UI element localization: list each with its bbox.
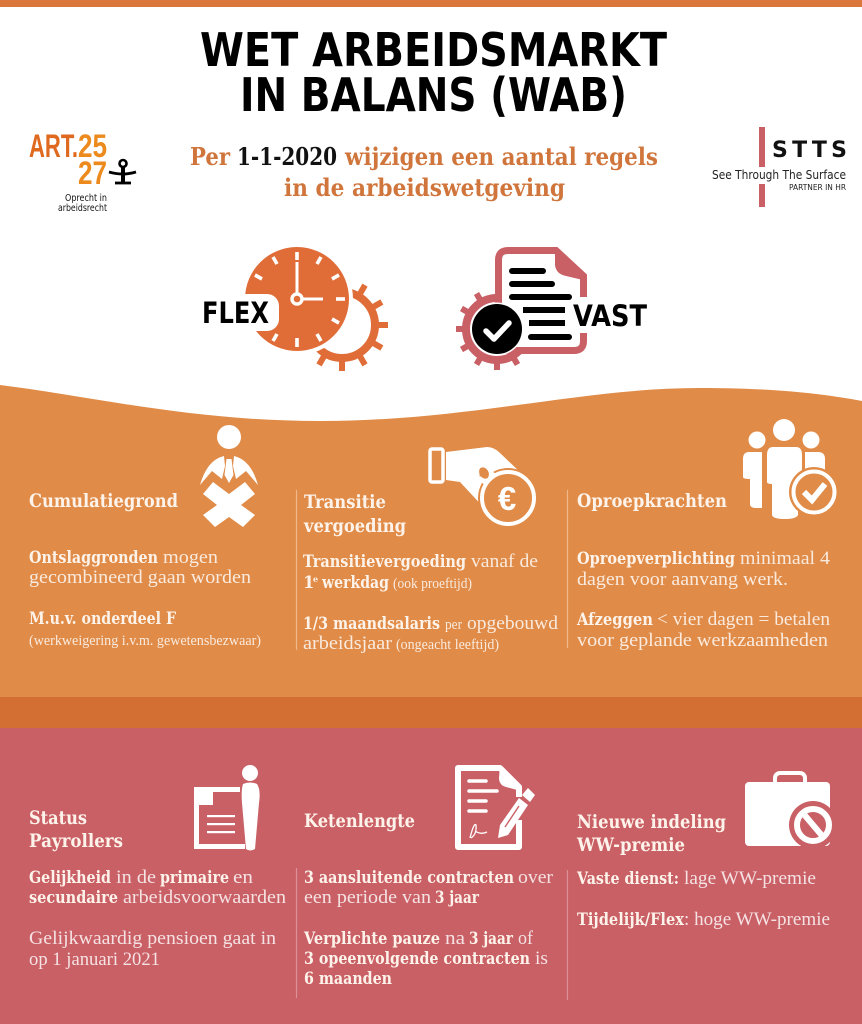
- text block: Ketenlengte: 3 opeenvolgende contracten: [304, 949, 530, 968]
- icon: vast document and gear: VAST: [573, 299, 647, 333]
- text block: Transitie vergoeding: vanaf de: [471, 551, 538, 572]
- text block: Transitie vergoeding: (ook proeftijd): [393, 576, 472, 592]
- text block: Ketenlengte: [303, 811, 554, 988]
- text block: Nieuwe indeling WW-premie: [576, 812, 830, 930]
- logo: ART.25 27: 27: [78, 155, 107, 191]
- icon: flex clock and gear: FLEX: [202, 296, 269, 330]
- text block: Nieuwe indeling WW-premie: WW-premie: [576, 835, 685, 856]
- icon: person with cross: [200, 425, 258, 527]
- text block: Cumulatiegrond: [29, 491, 261, 649]
- logo: STTS: STTS: [772, 138, 847, 163]
- text block: Nieuwe indeling WW-premie: Tijdelijk/Flex: [577, 910, 684, 929]
- text block: Status Payrollers: arbeidsvoorwaarden: [123, 887, 287, 908]
- logo: ART.25 27: 25: [78, 128, 107, 164]
- text block: Status Payrollers: primaire: [160, 868, 229, 887]
- text block: Ketenlengte: 3 jaar: [435, 888, 479, 907]
- text block: Transitie vergoeding: per: [445, 617, 462, 633]
- icon: signed contract with pen: [458, 766, 535, 847]
- logo: ART.25 27: Oprecht in: [65, 193, 107, 204]
- text block: Cumulatiegrond: M.u.v. onderdeel F: [29, 609, 176, 628]
- text block: Ketenlengte: of: [518, 928, 534, 949]
- text block: Ketenlengte: een periode van: [304, 887, 432, 908]
- logo: STTS: [712, 127, 847, 207]
- text block: Ketenlengte: is: [535, 948, 548, 969]
- text block: Nieuwe indeling WW-premie: Vaste dienst:: [576, 869, 679, 888]
- text block: Nieuwe indeling WW-premie: Nieuwe indeling: [577, 812, 726, 833]
- text block: Ketenlengte: na: [445, 928, 466, 949]
- logo: STTS: See Through The Surface: [712, 168, 846, 182]
- text block: Ketenlengte: 3 aansluitende contracten: [304, 868, 514, 887]
- text block: Transitie vergoeding: Transitie: [304, 492, 386, 513]
- text block: Oproepkrachten: Afzeggen: [576, 610, 653, 629]
- text block: Transitie vergoeding: arbeidsjaar: [303, 633, 393, 654]
- panel: orange section: [0, 385, 862, 697]
- text block: Cumulatiegrond: Cumulatiegrond: [29, 491, 178, 512]
- text block: Oproepkrachten: Oproepkrachten: [577, 491, 727, 512]
- text block: Status Payrollers: Status: [29, 808, 87, 829]
- icon: payroll document with person: [194, 765, 260, 850]
- icon: hand with euro: €: [498, 480, 516, 517]
- text block: Ketenlengte: over: [518, 867, 554, 888]
- title: [200, 23, 667, 122]
- subtitle: Per: [190, 142, 230, 171]
- subtitle: wijzigen een aantal regels: [344, 142, 658, 171]
- subtitle: in de arbeidswetgeving: [284, 173, 565, 202]
- icon: briefcase with prohibition sign: [745, 773, 837, 849]
- text block: Status Payrollers: Gelijkwaardig pensioen gaat in: [29, 928, 277, 949]
- text block: Status Payrollers: [29, 808, 287, 970]
- text block: Ketenlengte: 3 jaar: [469, 929, 513, 948]
- text block: Status Payrollers: op 1 januari 2021: [29, 949, 160, 970]
- subtitle: [190, 142, 658, 202]
- text block: Transitie vergoeding: e: [313, 574, 318, 584]
- text block: Transitie vergoeding: 1/3 maandsalaris: [303, 614, 440, 633]
- text block: Status Payrollers: Payrollers: [29, 831, 123, 852]
- text block: Status Payrollers: en: [233, 867, 254, 888]
- text block: Oproepkrachten: voor geplande werkzaamheden: [577, 630, 829, 651]
- text block: Transitie vergoeding: werkdag: [321, 573, 389, 592]
- text block: Transitie vergoeding: (ongeacht leeftijd): [396, 637, 499, 653]
- text block: Ketenlengte: 6 maanden: [304, 969, 392, 988]
- icon: vast document and gear: [456, 250, 652, 370]
- text block: Transitie vergoeding: vergoeding: [303, 516, 406, 537]
- text block: Oproepkrachten: < vier dagen = betalen: [657, 609, 830, 630]
- text block: Transitie vergoeding: Transitievergoeding: [303, 552, 466, 571]
- text block: Ketenlengte: Ketenlengte: [304, 811, 415, 832]
- text block: Status Payrollers: in de: [116, 867, 156, 888]
- text block: Transitie vergoeding: [303, 492, 559, 654]
- text block: Status Payrollers: secundaire: [29, 888, 118, 907]
- text block: Cumulatiegrond: gecombineerd gaan worden: [29, 567, 252, 588]
- dividers: [296, 490, 568, 1000]
- text block: Cumulatiegrond: mogen: [163, 547, 219, 568]
- title: WET ARBEIDSMARKT: [200, 23, 667, 77]
- icon: hand with euro: [430, 447, 538, 528]
- title: IN BALANS (WAB): [240, 68, 627, 122]
- logo: ART.25 27: ART.: [29, 128, 78, 164]
- text block: Nieuwe indeling WW-premie: : hoge WW-premie: [684, 909, 830, 930]
- text block: Transitie vergoeding: opgebouwd: [467, 613, 559, 634]
- subtitle: 1-1-2020: [237, 142, 337, 171]
- text block: Ketenlengte: Verplichte pauze: [303, 929, 440, 948]
- logo: STTS: PARTNER IN HR: [789, 183, 846, 192]
- text block: Cumulatiegrond: (werkweigering i.v.m. gewetensbezwaar): [29, 633, 261, 649]
- text block: Oproepkrachten: minimaal 4: [740, 548, 831, 569]
- icon: flex clock and gear: [190, 243, 388, 371]
- logo: ART.25 27: arbeidsrecht: [58, 203, 107, 214]
- text block: Transitie vergoeding: 1: [303, 573, 314, 592]
- text block: Oproepkrachten: [576, 491, 831, 651]
- text block: Nieuwe indeling WW-premie: lage WW-premie: [684, 868, 816, 889]
- band: dark orange separator: [0, 697, 862, 728]
- icon: group of people with check: [743, 419, 839, 519]
- logo: ART.25 27: [29, 128, 136, 214]
- panel: red section: [0, 728, 862, 1024]
- text block: Status Payrollers: Gelijkheid: [29, 868, 111, 887]
- text block: Oproepkrachten: dagen voor aanvang werk.: [577, 569, 788, 590]
- text block: Oproepkrachten: Oproepverplichting: [577, 549, 735, 568]
- text block: Cumulatiegrond: Ontslaggronden: [29, 548, 158, 567]
